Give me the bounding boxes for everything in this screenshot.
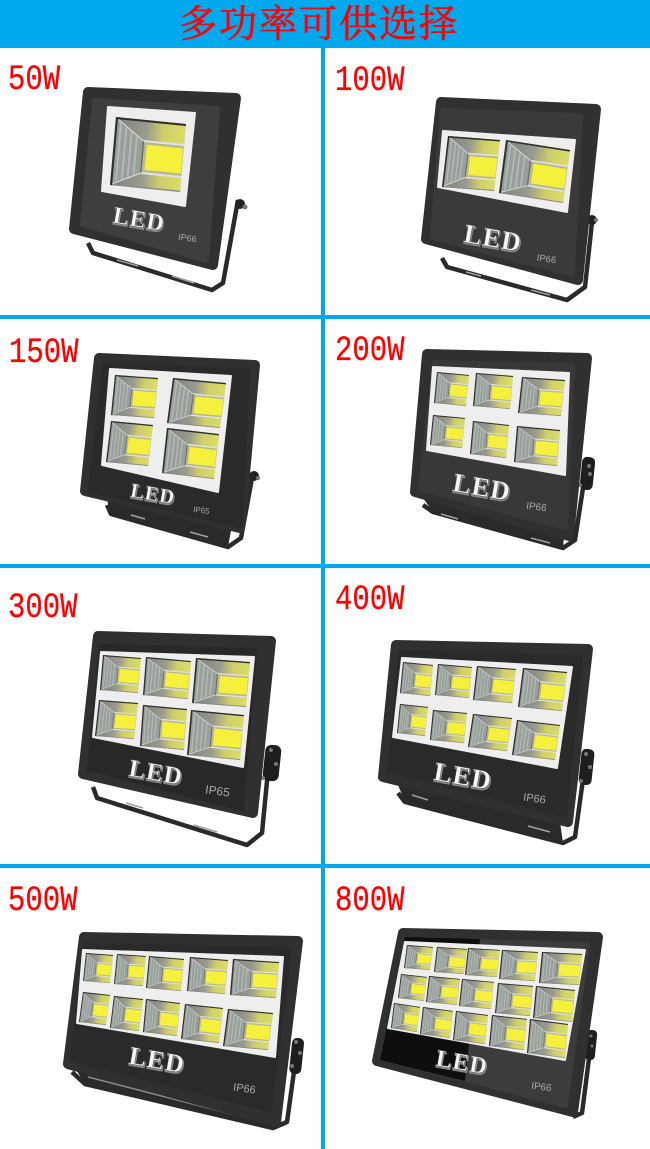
panel: 200W — [335, 331, 596, 548]
bracket — [398, 748, 595, 843]
lamp inner panel — [83, 101, 217, 260]
panel: 150W — [9, 333, 260, 547]
LED logo: LED — [129, 480, 177, 509]
lamp body — [74, 92, 236, 265]
panel: 300W — [8, 588, 282, 845]
LED logo: LED — [127, 757, 186, 793]
bracket — [93, 744, 282, 845]
LED modules — [430, 372, 565, 466]
lamp frame — [427, 367, 569, 475]
lamp body — [426, 102, 596, 280]
LED modules — [95, 655, 250, 760]
lamp body — [83, 636, 271, 813]
lamp inner panel — [383, 940, 587, 1105]
lamp frame — [93, 652, 254, 767]
bracket — [442, 215, 598, 300]
lamp body — [415, 354, 587, 536]
LED logo: LED — [432, 758, 495, 798]
lamp inner panel — [390, 653, 580, 814]
lamp frame — [438, 131, 575, 212]
IP rating: IP65 — [204, 782, 231, 800]
LED modules — [397, 662, 567, 760]
label: 400W: 400W — [335, 580, 405, 620]
IP rating: IP66 — [536, 253, 557, 266]
LED logo: LED — [111, 203, 167, 237]
LED logo: LED — [451, 469, 514, 509]
lamp frame — [102, 107, 195, 206]
dark gloss panel — [380, 937, 480, 1081]
header banner — [0, 0, 650, 48]
LED modules — [106, 375, 226, 479]
label: 300W: 300W — [8, 588, 78, 628]
IP rating: IP66 — [178, 232, 197, 244]
bracket — [423, 456, 596, 548]
lamp inner panel — [421, 363, 572, 527]
LED logo: LED — [462, 220, 525, 260]
LED modules — [391, 945, 582, 1058]
panel: 500W — [8, 881, 305, 1128]
IP rating: IP65 — [193, 505, 211, 516]
panel: 100W — [335, 61, 598, 300]
lamp inner panel — [91, 366, 247, 525]
lamp body — [377, 933, 598, 1112]
IP rating: IP66 — [530, 1081, 553, 1094]
bracket — [88, 199, 248, 290]
panel: 50W — [8, 60, 248, 290]
LED modules — [79, 953, 279, 1050]
LED logo: LED — [127, 1042, 188, 1081]
bracket — [70, 1037, 305, 1128]
label: 100W: 100W — [335, 61, 405, 101]
lamp frame — [77, 950, 283, 1057]
LED logo: LED — [432, 756, 494, 796]
label: 150W: 150W — [9, 333, 79, 373]
lamp body — [85, 358, 255, 528]
label: 500W: 500W — [8, 881, 78, 921]
LED logo: LED — [112, 204, 168, 239]
label: 800W: 800W — [335, 881, 405, 921]
panel: 400W — [335, 580, 595, 843]
title: 多功率可供选择 — [179, 4, 459, 46]
LED logo: LED — [129, 481, 178, 511]
panel: 800W — [335, 881, 598, 1117]
LED logo: LED — [127, 755, 185, 791]
lamp frame — [102, 369, 231, 492]
lamp inner panel — [73, 946, 289, 1109]
IP rating: IP66 — [522, 792, 546, 807]
LED logo: LED — [434, 1046, 490, 1080]
label: 200W: 200W — [335, 331, 405, 371]
lamp body — [383, 645, 588, 822]
label: 50W: 50W — [8, 60, 61, 100]
LED logo: LED — [462, 218, 524, 258]
IP rating: IP66 — [232, 1082, 256, 1097]
IP rating: IP66 — [525, 501, 548, 514]
LED logo: LED — [451, 467, 513, 507]
lamp frame — [388, 942, 585, 1060]
LED logo: LED — [435, 1047, 491, 1082]
bracket — [573, 1030, 598, 1117]
lamp inner panel — [90, 647, 254, 808]
lamp inner panel — [433, 111, 580, 274]
lamp body — [68, 937, 298, 1122]
LED logo: LED — [127, 1041, 187, 1079]
lamp frame — [393, 658, 572, 768]
bracket — [107, 471, 260, 547]
LED modules — [442, 136, 570, 203]
LED module — [110, 117, 186, 192]
